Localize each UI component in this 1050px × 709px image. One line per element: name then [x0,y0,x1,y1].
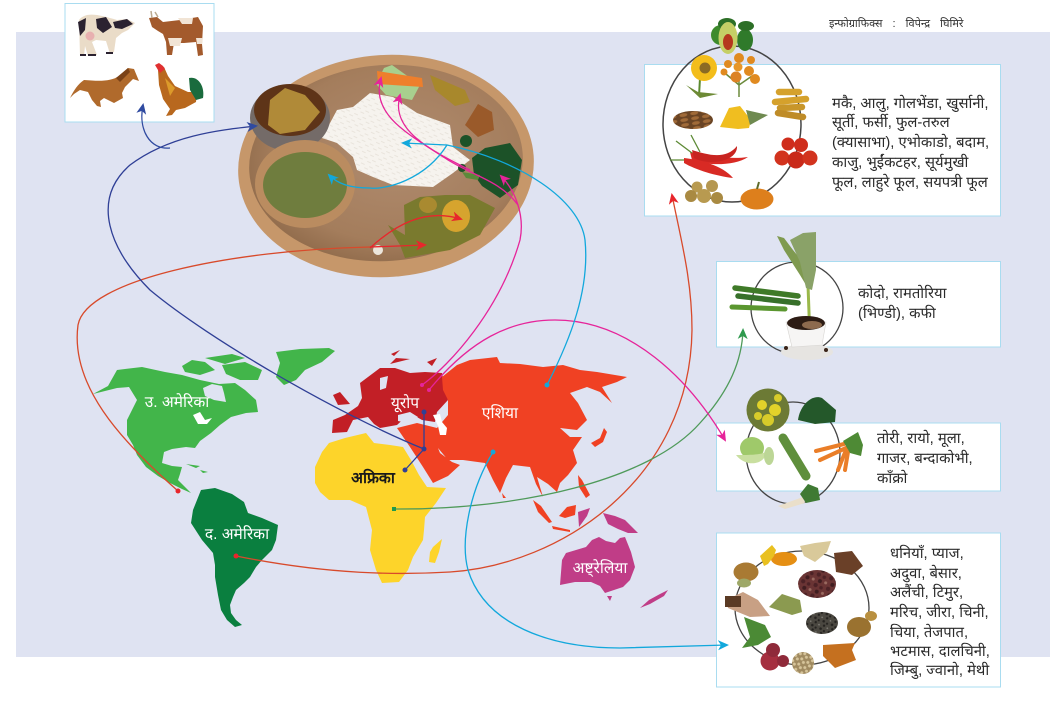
food: pickles [430,75,494,137]
continent: Australia and Oceania [560,508,668,608]
arrow: Europe to plate (pink) [379,78,725,440]
arrow: Europe to livestock and bowl [108,105,426,472]
icon: cabbage [736,437,774,465]
credit line: इन्फोग्राफिक्स : विपेन्द्र घिमिरे [829,17,964,30]
world map [93,348,668,627]
text: crops list: काजु, भुईंकटहर, सूर्यमुखी [832,153,970,172]
text: spice list: मरिच, जीरा, चिनी, [890,603,989,621]
icon: rooster [155,63,203,116]
icon: pumpkin [740,182,774,210]
text: vegetable list: काँक्रो [877,469,909,487]
icon: bay leaves [769,594,802,615]
icon: coffee cup [781,316,833,360]
ring [751,262,843,354]
labels: continents: उ. अमेरिका [145,393,210,411]
icon: black seeds [806,612,838,634]
arrow: Africa to panel [392,330,743,511]
text: crops list [832,94,989,192]
panel: top-right food list [644,18,1000,216]
food: greens [458,135,522,198]
text: africa crops list: (भिण्डी), कफी [858,304,937,322]
icon: turmeric [760,545,797,566]
plate of dal bhat [231,45,541,287]
text: spice list: भटमास, दालचिनी, [890,642,990,660]
food: carrot and salad [376,65,423,100]
labels: continents: यूरोप [391,394,420,413]
icon: baby corn [775,92,806,117]
plate rim [231,45,541,287]
icon: coriander leaves [742,617,771,648]
icon: tomatoes [774,138,818,168]
text: crops list: मकै, आलु, गोलभेंडा, खुर्सानी, [832,94,988,112]
arrow: Asia to spice panel [465,450,727,648]
labels: continents [145,393,628,577]
icon: cucumber [783,438,806,476]
icon: dried brown spice [834,551,863,575]
ring [735,551,869,665]
labels: continents: द. अमेरिका [205,525,270,543]
icon: mustard flower [746,388,790,432]
icon: cumin and wood [725,592,770,617]
text: vegetable list: गाजर, बन्दाकोभी, [877,449,973,467]
text: spice list: चिया, तेजपात, [890,623,968,641]
panel: livestock [65,4,214,122]
icon: potatoes [685,180,723,204]
food: vegetable curry [388,195,495,258]
icon: sunflower [686,55,718,98]
caspian sea [433,414,447,435]
panel: vegetables [716,388,1000,509]
icon: chillies [670,135,748,178]
panel: spices [716,533,1000,687]
hudson bay [203,384,226,402]
icon: pineapple [720,106,768,129]
text: spice list: धनियाँ, प्याज, [890,544,964,562]
icon: ginger [800,541,831,562]
icon: coriander powder cup [734,562,758,588]
text: africa crops list: कोदो, रामतोरिया [858,284,948,302]
icon: marigold [720,53,760,97]
arrow: South America to crop panel [234,195,692,573]
icon: spice powder [847,611,877,637]
text: spice list: अलैंची, टिमुर, [890,583,963,601]
icon: timur peppercorn [798,570,836,598]
icon: cow [78,15,135,56]
icon: okra [732,288,798,309]
text: vegetable list [877,429,973,487]
text: spice list: अदुवा, बेसार, [890,564,962,583]
text: africa crops list [858,284,948,322]
text: spice list [890,544,990,679]
icon: radish [778,484,820,509]
text: spice list: जिम्बु, ज्वानो, मेथी [890,661,990,679]
panel: africa crops [716,232,1000,360]
icon: soybean ball [792,652,814,674]
ring [746,402,840,504]
text: crops list: फूल, लाहुरे फूल, सयपत्री फूल [832,173,989,192]
great lakes [193,412,212,424]
continent: Europe [332,350,448,433]
arrow: Asia to plate (cyan) [329,143,586,388]
text: crops list: सूर्ती, फर्सी, फुल-तरुल [832,113,951,132]
icon: avocado [711,18,754,54]
icon: carrots [816,432,863,470]
icon: onions [760,643,789,670]
ring [663,46,801,202]
continent: South America [191,488,278,627]
continent: North America [93,348,335,493]
icon: bull [149,11,203,56]
text: vegetable list: तोरी, रायो, मूला, [877,429,965,448]
icon: almonds [673,111,713,129]
baltic and black sea [380,376,418,423]
continent: Africa [315,433,446,583]
food: dal bowl [255,140,355,228]
labels: continents: अष्ट्रेलिया [573,559,628,577]
icon: millet stalk [777,232,816,340]
labels: continents: अफ्रिका [351,468,396,487]
food: curry bowl [250,84,330,151]
icon: horse [70,68,139,107]
icon: leafy greens [798,397,836,424]
food: rice [322,93,470,187]
icon: cinnamon [823,643,856,668]
arrow: North America to plate (orange-red) [77,216,461,494]
labels: continents: एशिया [482,404,519,422]
text: crops list: (क्यासाभा), एभोकाडो, बदाम, [832,133,989,151]
continent: Asia [397,357,627,532]
garnish rice [373,245,383,255]
